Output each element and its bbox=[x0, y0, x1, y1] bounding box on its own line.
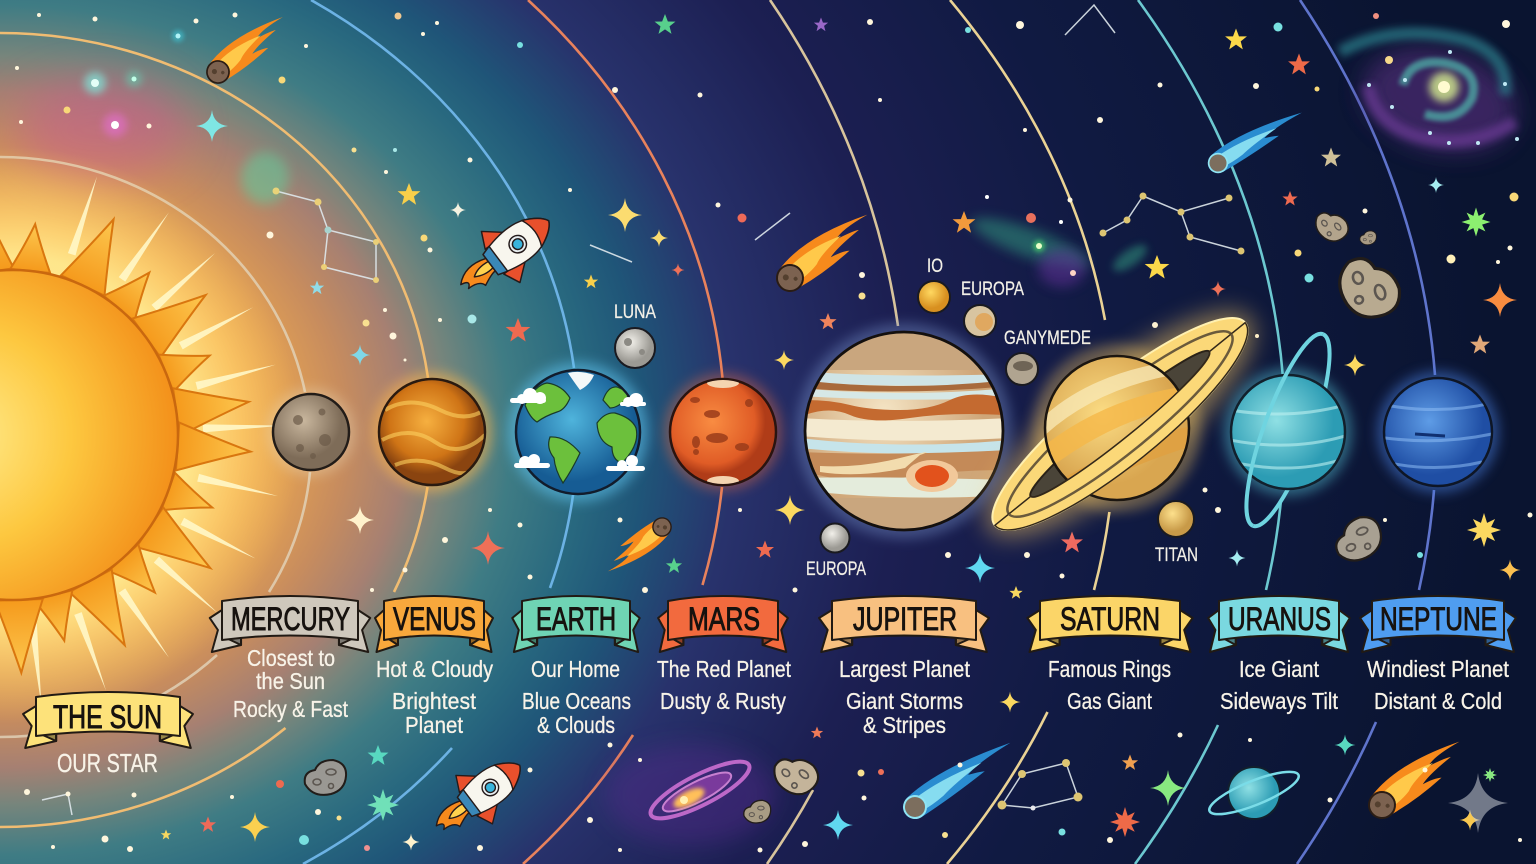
moons of Jupiter bbox=[806, 256, 1091, 580]
comets bbox=[200, 8, 1471, 825]
label: Jupiter: JUPITER bbox=[853, 601, 957, 637]
planet: Venus bbox=[372, 372, 492, 492]
planet: Mars bbox=[664, 373, 782, 491]
planet: Uranus bbox=[1224, 326, 1352, 534]
label: Venus: VENUS bbox=[393, 601, 476, 637]
moons of Jupiter: EUROPA bbox=[806, 559, 866, 580]
moon: Titan bbox=[1155, 501, 1198, 566]
label: The Sun: OUR STAR bbox=[57, 748, 158, 778]
label: Earth: Blue Oceans bbox=[522, 688, 631, 714]
label: Earth: EARTH bbox=[536, 601, 616, 637]
label: Neptune: Distant & Cold bbox=[1374, 688, 1502, 714]
label: Uranus bbox=[1208, 596, 1350, 714]
label: Mercury bbox=[210, 596, 370, 722]
moons of Jupiter: EUROPA bbox=[961, 279, 1024, 300]
label: Venus: Planet bbox=[405, 712, 464, 738]
label: Mercury: Closest to bbox=[247, 645, 335, 671]
icon: corner sparkle bbox=[1448, 773, 1508, 833]
label: Mars bbox=[657, 596, 792, 714]
nebula: centre right bbox=[967, 195, 1151, 287]
label: Saturn: Gas Giant bbox=[1067, 688, 1152, 714]
galaxy: bottom bbox=[605, 745, 775, 845]
label: Venus: Brightest bbox=[392, 688, 477, 714]
label: Mercury: MERCURY bbox=[231, 601, 350, 637]
rockets bbox=[419, 195, 568, 852]
asteroids bbox=[305, 204, 1406, 823]
label: Uranus: URANUS bbox=[1228, 601, 1331, 637]
mini planet: bottom bbox=[1205, 764, 1303, 822]
label: Earth: Our Home bbox=[531, 656, 620, 682]
galaxy: top right bbox=[1340, 32, 1528, 168]
label: Jupiter: Giant Storms bbox=[846, 688, 963, 714]
label: Neptune: Windiest Planet bbox=[1367, 656, 1510, 682]
label: Earth: & Clouds bbox=[537, 712, 615, 738]
nebula: top left bbox=[15, 30, 289, 204]
moons of Jupiter: GANYMEDE bbox=[1004, 328, 1091, 349]
moon: Luna: LUNA bbox=[614, 302, 656, 323]
label: The Sun bbox=[23, 692, 193, 778]
label: Mercury: Rocky & Fast bbox=[233, 696, 349, 722]
label: Earth bbox=[512, 596, 640, 738]
label: Neptune bbox=[1360, 596, 1516, 714]
label: Saturn: SATURN bbox=[1060, 601, 1160, 637]
planet: Saturn bbox=[971, 296, 1270, 552]
label: Neptune: NEPTUNE bbox=[1380, 601, 1497, 637]
constellations bbox=[42, 5, 1244, 815]
planet: Mercury bbox=[267, 388, 355, 476]
planet: Earth bbox=[508, 362, 648, 502]
label: Mars: MARS bbox=[688, 601, 760, 637]
label: The Sun: THE SUN bbox=[53, 699, 162, 735]
planet: Neptune bbox=[1377, 371, 1499, 493]
moon: Titan: TITAN bbox=[1155, 545, 1198, 566]
label: Mars: The Red Planet bbox=[657, 656, 792, 682]
label: Jupiter bbox=[819, 596, 989, 738]
sun bbox=[0, 147, 301, 723]
label: Uranus: Sideways Tilt bbox=[1220, 688, 1339, 714]
label: Venus: Hot & Cloudy bbox=[376, 656, 493, 682]
moons of Jupiter: IO bbox=[927, 256, 943, 277]
label: Venus bbox=[375, 596, 493, 738]
label: Mercury: the Sun bbox=[256, 668, 325, 694]
label: Saturn bbox=[1027, 596, 1193, 714]
label: Mars: Dusty & Rusty bbox=[660, 688, 786, 714]
label: Jupiter: & Stripes bbox=[863, 712, 946, 738]
label: Uranus: Ice Giant bbox=[1239, 656, 1320, 682]
label: Jupiter: Largest Planet bbox=[839, 656, 971, 682]
moon: Luna bbox=[614, 302, 656, 368]
planet: Jupiter bbox=[796, 323, 1012, 539]
label: Saturn: Famous Rings bbox=[1048, 656, 1171, 682]
